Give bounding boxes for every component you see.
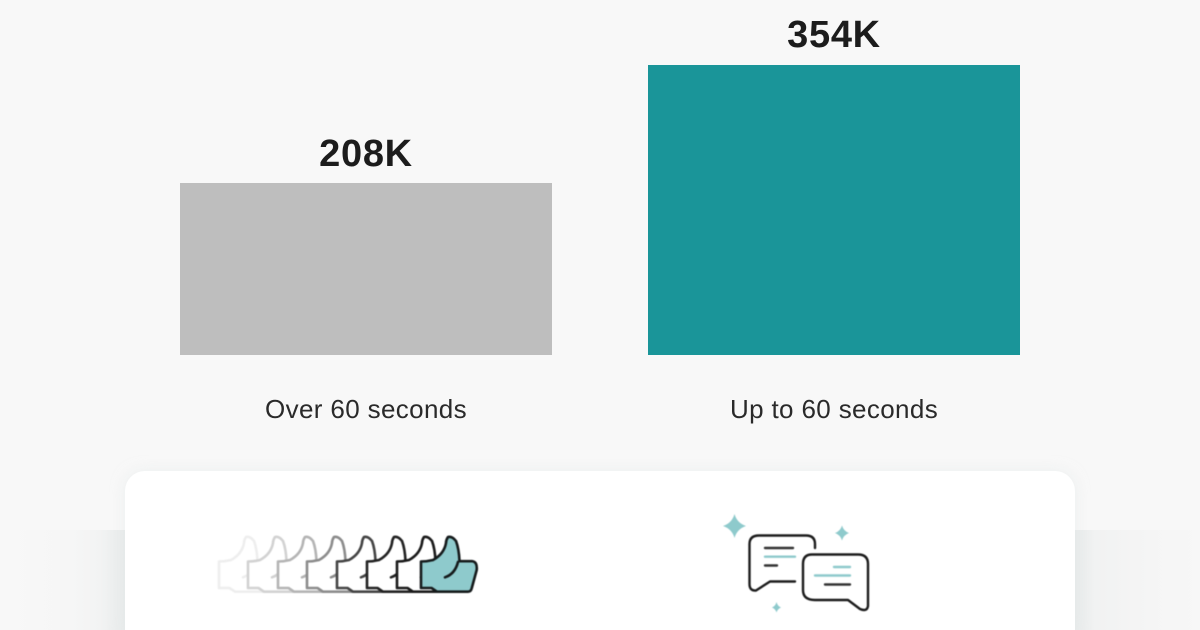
ghost thumb 1 [219,537,275,592]
card panel [125,471,1075,630]
bar value: up to 60 seconds: 354K [787,14,881,56]
bar label: over 60 seconds: Over 60 seconds [265,394,467,424]
background lower band [0,530,1200,630]
ghost thumb 7 [397,537,453,592]
ghost thumb 4 [307,537,363,592]
right bubble [803,554,868,610]
sparkles [723,514,849,612]
ghost thumb 5 [337,537,393,592]
ghost thumb 2 [248,537,304,592]
ghost thumb 3 [278,537,334,592]
icon: chat bubbles with sparkles [723,514,870,612]
right bubble text lines [815,567,850,584]
bar label: up to 60 seconds: Up to 60 seconds [730,394,938,424]
bar value: over 60 seconds: 208K [319,133,413,175]
bar: over 60 seconds [180,183,552,355]
teal thumb [421,537,477,592]
bar: up to 60 seconds [648,65,1020,355]
icon: row of thumbs up [218,534,479,594]
ghost thumb 6 [367,537,423,592]
left bubble [750,536,815,591]
left bubble text lines [765,548,795,566]
